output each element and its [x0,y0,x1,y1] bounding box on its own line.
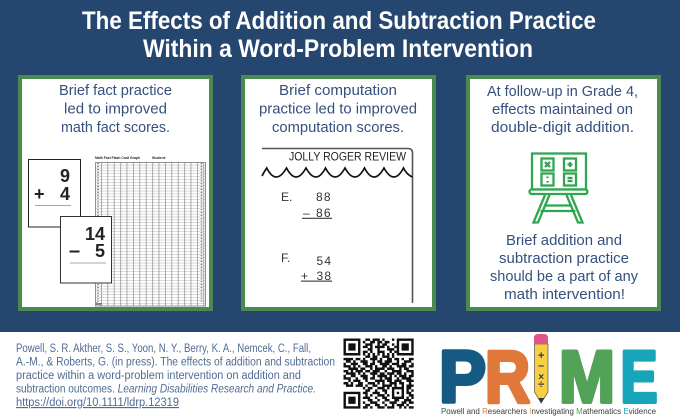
icon: pencil as letter I: – [538,360,544,372]
text: follow-up finding [487,83,638,136]
citation: practice within a word-problem intervention on addition and [16,370,301,382]
logo letter R: R [485,337,530,416]
text: computation practice finding: Brief computation [279,82,397,99]
text: computation practice finding [259,82,417,136]
text: recommendation: subtraction practice [499,250,629,267]
QR code [344,338,414,409]
flash card: 14 - 5: 14 [85,224,105,244]
logo letter P: P [439,337,486,416]
text: recommendation: Brief addition and [506,232,622,249]
logo letter E: E [620,337,658,416]
problem E [281,190,332,220]
citation [16,343,335,409]
text: fact practice finding: led to improved [64,100,167,118]
text: recommendation: math intervention! [504,286,625,303]
icon: pencil as letter I: ÷ [538,379,544,391]
chart: math fact flash card graph [95,156,206,306]
footer band [0,332,680,416]
flash card: 9 + 4: + [34,184,45,204]
flash card: 9 + 4 [28,160,80,227]
text: follow-up finding: effects maintained on [492,101,633,118]
text: fact practice finding: math fact scores. [61,119,170,136]
citation: https://doi.org/10.1111/ldrp.12319 [16,397,179,409]
problem F: 38 [316,269,332,283]
flash card: 9 + 4: 9 [60,166,70,186]
text: fact practice finding [59,82,172,136]
icon: pencil as letter I: × [538,372,544,383]
chart: math fact flash card graph: Day [96,302,102,306]
icon: pencil as letter I [534,334,548,403]
text: follow-up finding: double-digit addition. [491,119,634,136]
panel: follow-up and recommendation [468,77,659,309]
problem F: + [301,269,308,283]
icon: pencil as letter I: + [538,350,544,362]
text: follow-up finding: At follow-up in Grade 4, [487,83,638,100]
title: The Effects of Addition and Subtraction Practice [82,7,596,35]
flash card: 14 - 5 [60,216,112,283]
text: computation practice finding: computation scores. [272,119,404,136]
title: Within a Word-Problem Intervention [143,35,533,63]
citation: A.-M., & Roberts, G. (in press). The effects of addition and subtraction [16,356,335,368]
problem E: E. [281,190,292,204]
worksheet heading: JOLLY ROGER REVIEW [289,150,407,164]
text: computation practice finding: practice led to improved [259,100,417,118]
problem F: 54 [316,254,332,268]
flash card: 14 - 5: 5 [95,241,105,261]
logo: PRIME [439,334,658,416]
problem E: 88 [316,190,332,204]
problem E: 86 [316,206,332,220]
chart: math fact flash card graph: Student: [152,156,166,160]
panel: computation practice [243,77,434,309]
text: fact practice finding: Brief fact practice [59,82,172,99]
problem F [281,251,332,283]
flash card: 9 + 4: 4 [60,184,70,204]
logo tagline: Powell and Researchers Investigating Mathematics Evidence [441,407,657,416]
logo letter M: M [559,337,615,416]
text: recommendation [490,232,638,303]
citation: subtraction outcomes. Learning Disabilities Research and Practice. [16,384,316,396]
citation: Powell, S. R. Akther, S. S., Yoon, N. Y., Berry, K. A., Nemcek, C., Fall, [16,343,311,355]
panel: fact practice [20,77,211,309]
problem E: – [303,206,310,220]
icon: math chalkboard on easel [530,154,588,222]
title [82,7,596,63]
chart: math fact flash card graph: Math Fact Flash Card Graph [95,156,140,160]
text: recommendation: should be a part of any [490,268,638,285]
worksheet: Jolly Roger Review [262,148,412,303]
problem F: F. [281,251,290,265]
